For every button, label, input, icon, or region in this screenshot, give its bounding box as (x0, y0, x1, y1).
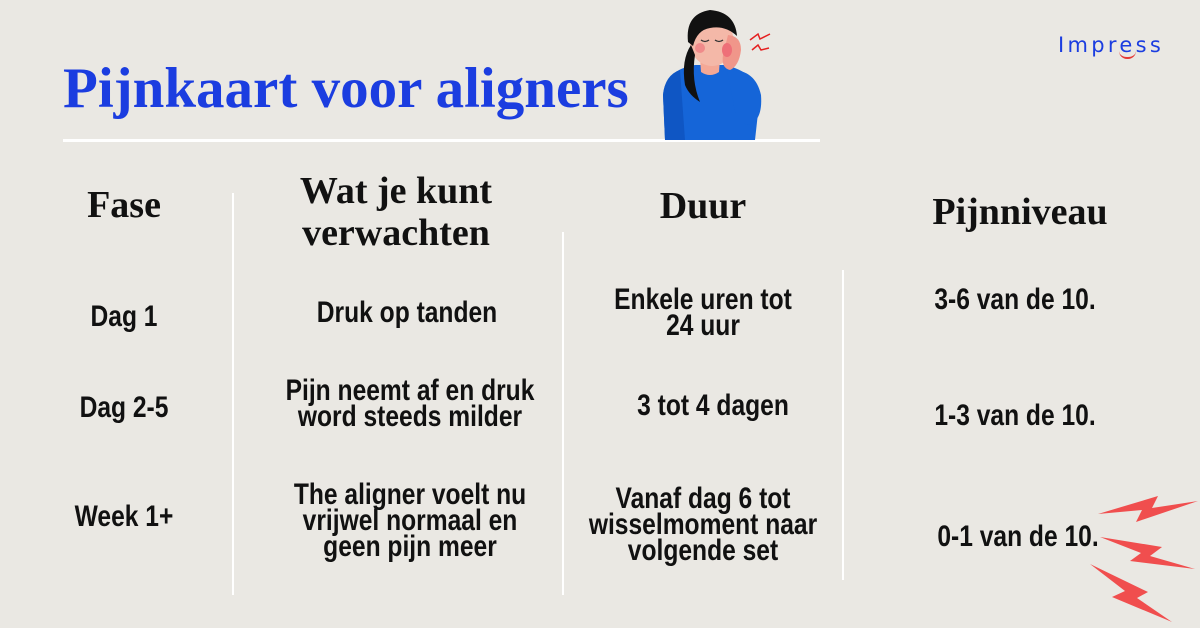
text: 0-1 van de 10. (937, 520, 1099, 553)
text: wisselmoment naar (589, 508, 817, 541)
text: geen pijn meer (323, 530, 497, 563)
header: Fase: Fase (87, 184, 161, 226)
text: 3 tot 4 dagen (637, 389, 789, 422)
text: Pijn neemt af en druk (286, 374, 534, 407)
dividers (232, 193, 234, 595)
header: Duur: Duur (660, 185, 746, 227)
logo: Impress: Impress (1058, 33, 1164, 57)
header: Pijnniveau: Pijnniveau (932, 191, 1108, 233)
text: word steeds milder (298, 400, 522, 433)
header: Wat je kunt verwachten: Wat je kunt (300, 170, 492, 212)
row 2: Dag 2-5 (80, 391, 168, 424)
text: 24 uur (666, 309, 740, 342)
text: Enkele uren tot (614, 283, 792, 316)
text: vrijwel normaal en (303, 504, 517, 537)
text: Vanaf dag 6 tot (616, 482, 790, 515)
text: 3-6 van de 10. (934, 283, 1096, 316)
text: 1-3 van de 10. (934, 399, 1096, 432)
row 3: Week 1+ (75, 500, 173, 533)
text: volgende set (628, 534, 778, 567)
title: Pijnkaart voor aligners (63, 57, 629, 120)
text: The aligner voelt nu (294, 478, 526, 511)
header: Wat je kunt verwachten: verwachten (302, 212, 490, 254)
icon: woman with toothache (663, 10, 770, 140)
row 1: Dag 1 (91, 300, 157, 333)
text: Druk op tanden (317, 296, 497, 329)
header: Wat je kunt verwachten (300, 170, 492, 254)
